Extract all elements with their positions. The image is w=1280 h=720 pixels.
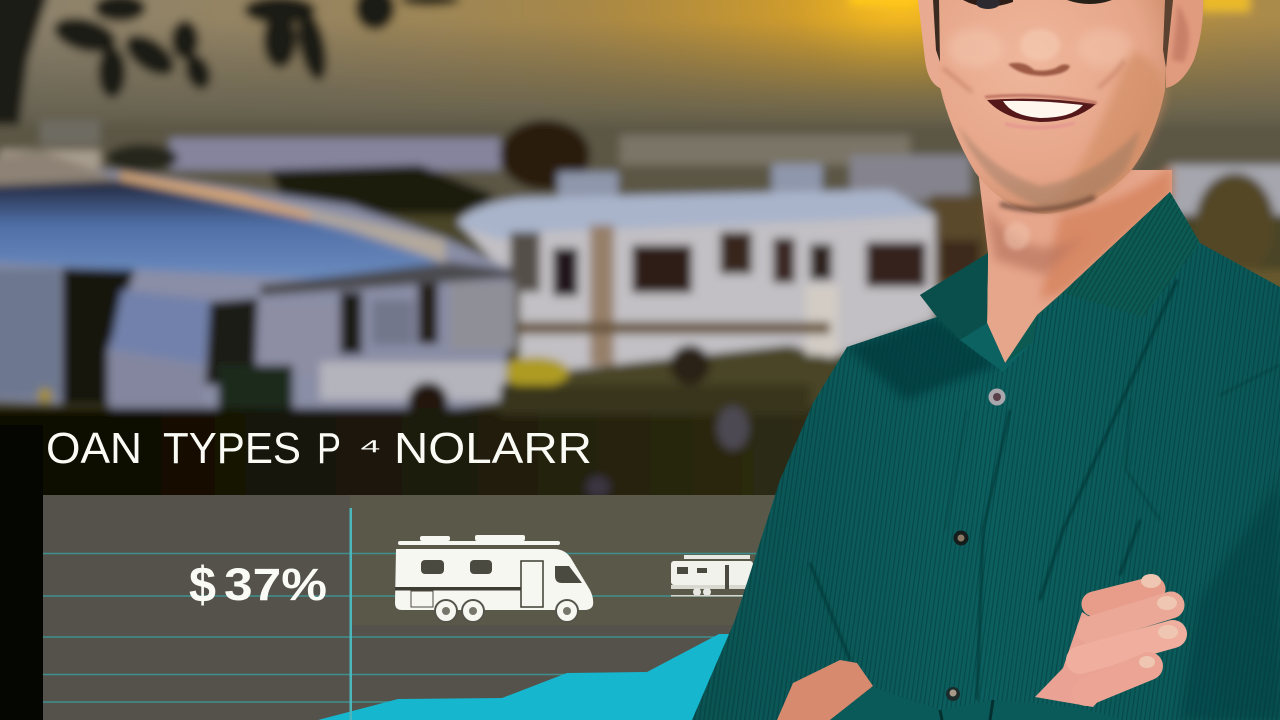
shirt torso and arms <box>692 192 1280 720</box>
value label: 37% <box>224 559 327 610</box>
right cheek shade <box>1050 50 1165 212</box>
right ear <box>1165 0 1203 88</box>
distant haze and campers <box>0 125 1280 215</box>
sleeve cuff across <box>830 687 1123 720</box>
lower left hand <box>777 660 873 720</box>
vertical axis <box>350 508 352 720</box>
face <box>936 0 1168 214</box>
left camper <box>0 150 515 425</box>
shirt stripes <box>690 190 1280 720</box>
title: NOLARR <box>394 424 592 473</box>
left ear <box>918 0 945 90</box>
buttons <box>988 388 1006 406</box>
background photo: campground at sunset <box>0 0 1280 495</box>
title <box>46 424 592 473</box>
title: ⁴ <box>358 434 382 467</box>
value label <box>189 557 327 613</box>
title: P <box>317 424 341 473</box>
value label: $ <box>189 557 216 613</box>
area series <box>318 634 760 720</box>
person <box>690 0 1280 720</box>
trees <box>500 120 590 190</box>
title: TYPES <box>163 424 301 473</box>
neck <box>978 170 1172 366</box>
hair sideburns <box>933 0 940 62</box>
dark foreground grass <box>0 400 808 495</box>
yellow flowers <box>501 357 569 387</box>
smile <box>987 99 1096 122</box>
icon: small motorhome <box>671 555 753 596</box>
nose <box>1008 63 1070 76</box>
mid ground <box>0 215 1280 415</box>
arm fold lines <box>810 280 1280 700</box>
smile creases <box>943 60 1124 92</box>
left dark edge <box>0 425 43 720</box>
chart grid lines <box>43 554 780 702</box>
eyes <box>963 0 1013 7</box>
cheek highlights <box>947 28 1003 68</box>
right hand with fingers <box>1035 574 1178 707</box>
panel: chart <box>43 495 783 720</box>
fingernails <box>1141 574 1161 588</box>
sky <box>18 0 1280 136</box>
panel background <box>43 495 783 720</box>
shirt shading <box>810 280 1280 720</box>
icon: large motorhome <box>395 535 593 622</box>
collar <box>920 192 1200 372</box>
stubble <box>958 125 1140 208</box>
title: OAN <box>46 424 142 473</box>
tree at top left <box>0 0 462 129</box>
right motorhome <box>458 164 935 385</box>
